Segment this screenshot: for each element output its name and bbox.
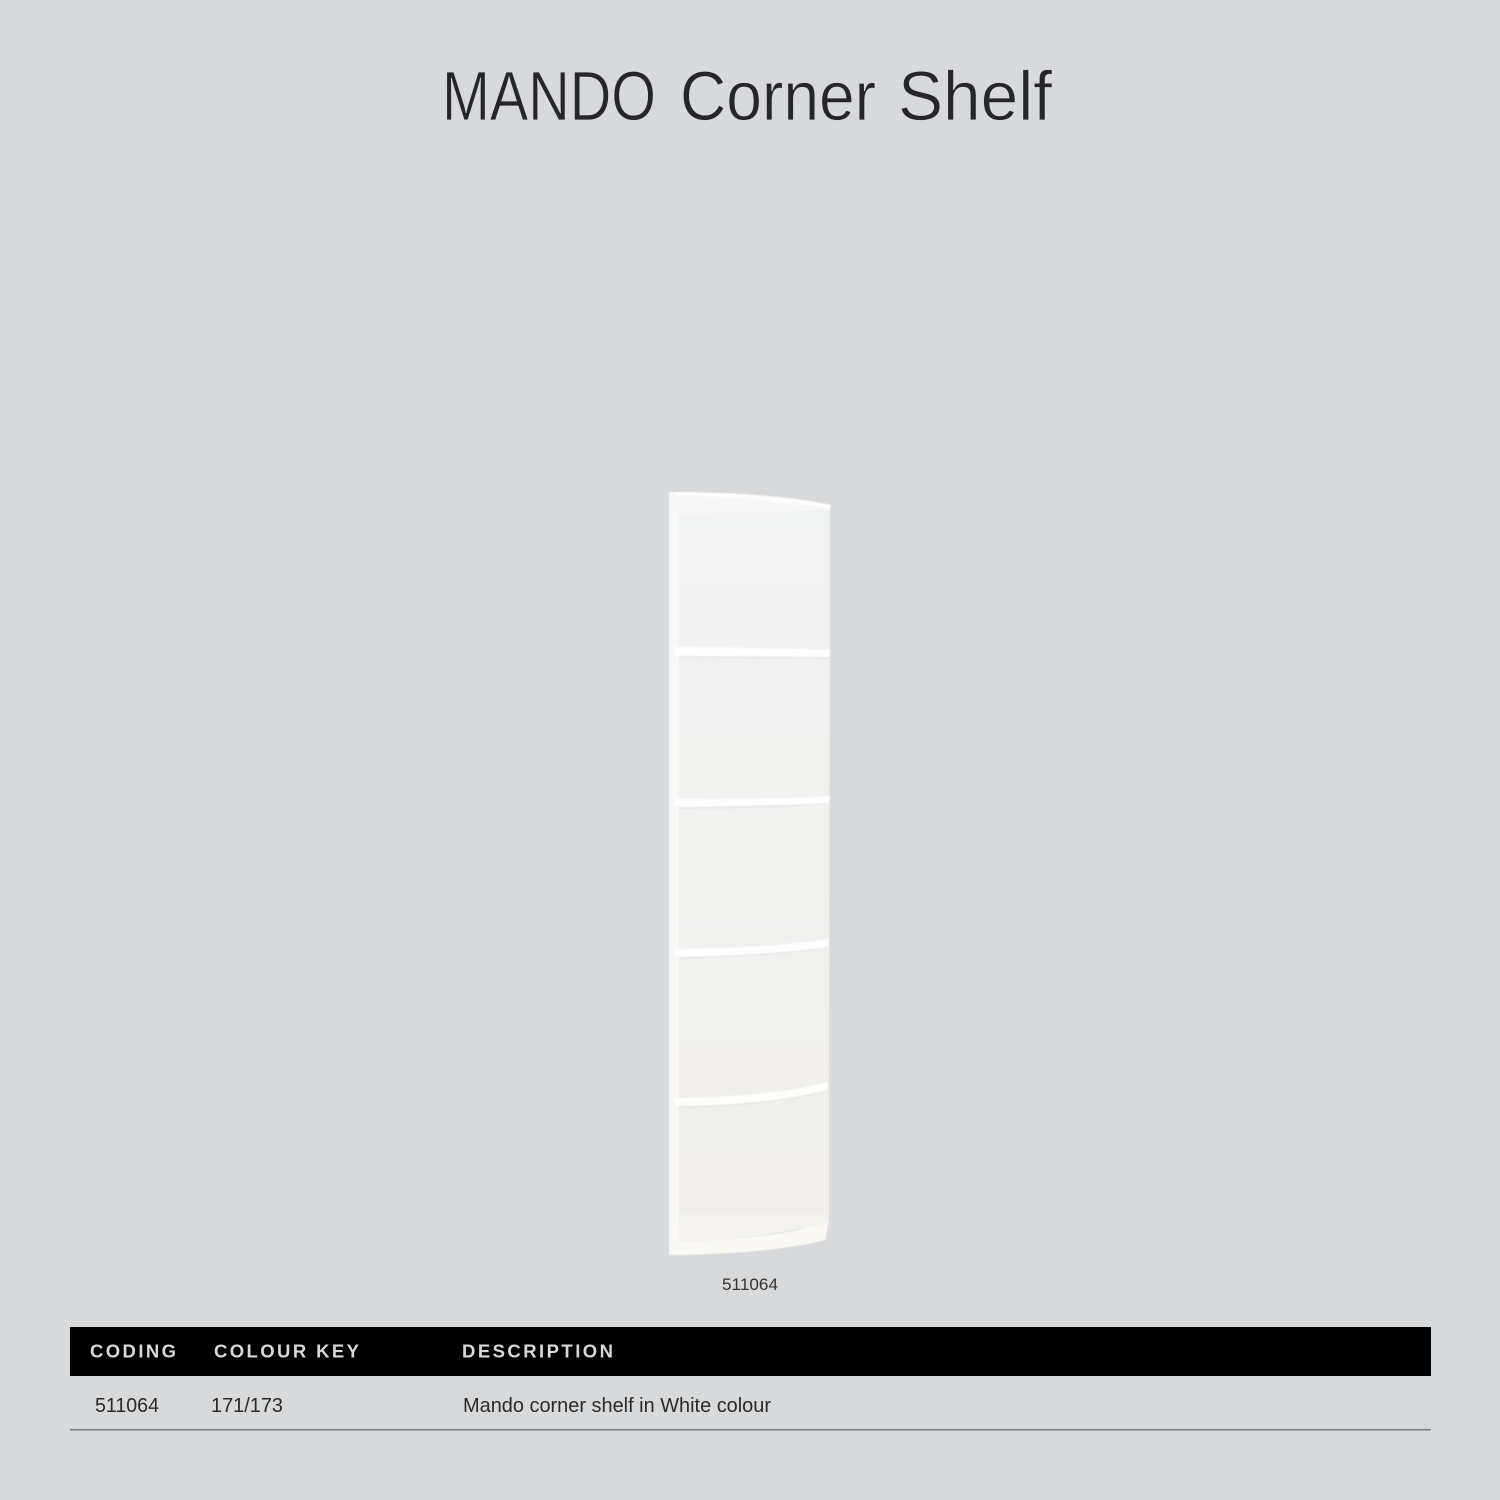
shelf 1 shadow bbox=[679, 655, 829, 659]
row: colour key: 171/173 bbox=[211, 1395, 283, 1417]
row: code: 511064 bbox=[95, 1395, 159, 1417]
row: description: Mando corner shelf in White colour bbox=[463, 1395, 771, 1417]
product image: corner shelf bbox=[669, 492, 831, 1255]
table bbox=[70, 1327, 1431, 1430]
title: Shelf bbox=[898, 57, 1053, 135]
shelf inner floor bbox=[675, 1213, 827, 1243]
shelf 4 bbox=[675, 1082, 828, 1106]
shelf 2 shadow bbox=[679, 802, 829, 809]
table header bar bbox=[70, 1327, 1431, 1376]
header: coding: CODING bbox=[90, 1340, 176, 1362]
shelf back panel bbox=[675, 505, 830, 1245]
title: MANDO bbox=[442, 57, 656, 135]
title: Corner bbox=[680, 57, 876, 135]
header: description: DESCRIPTION bbox=[462, 1340, 613, 1362]
shelf 2 bbox=[675, 796, 830, 807]
title bbox=[442, 57, 1053, 135]
shelf 1 bbox=[675, 647, 830, 657]
top board bbox=[669, 492, 831, 513]
left post bbox=[669, 492, 679, 1255]
product code caption: 511064 bbox=[722, 1276, 778, 1294]
shelf 4 shadow bbox=[679, 1089, 827, 1108]
shelf 3 shadow bbox=[679, 946, 828, 959]
bottom plinth bbox=[672, 1222, 828, 1255]
header: colour key: COLOUR KEY bbox=[214, 1340, 360, 1362]
shelf 3 bbox=[675, 939, 829, 957]
table bottom rule bbox=[70, 1429, 1431, 1430]
